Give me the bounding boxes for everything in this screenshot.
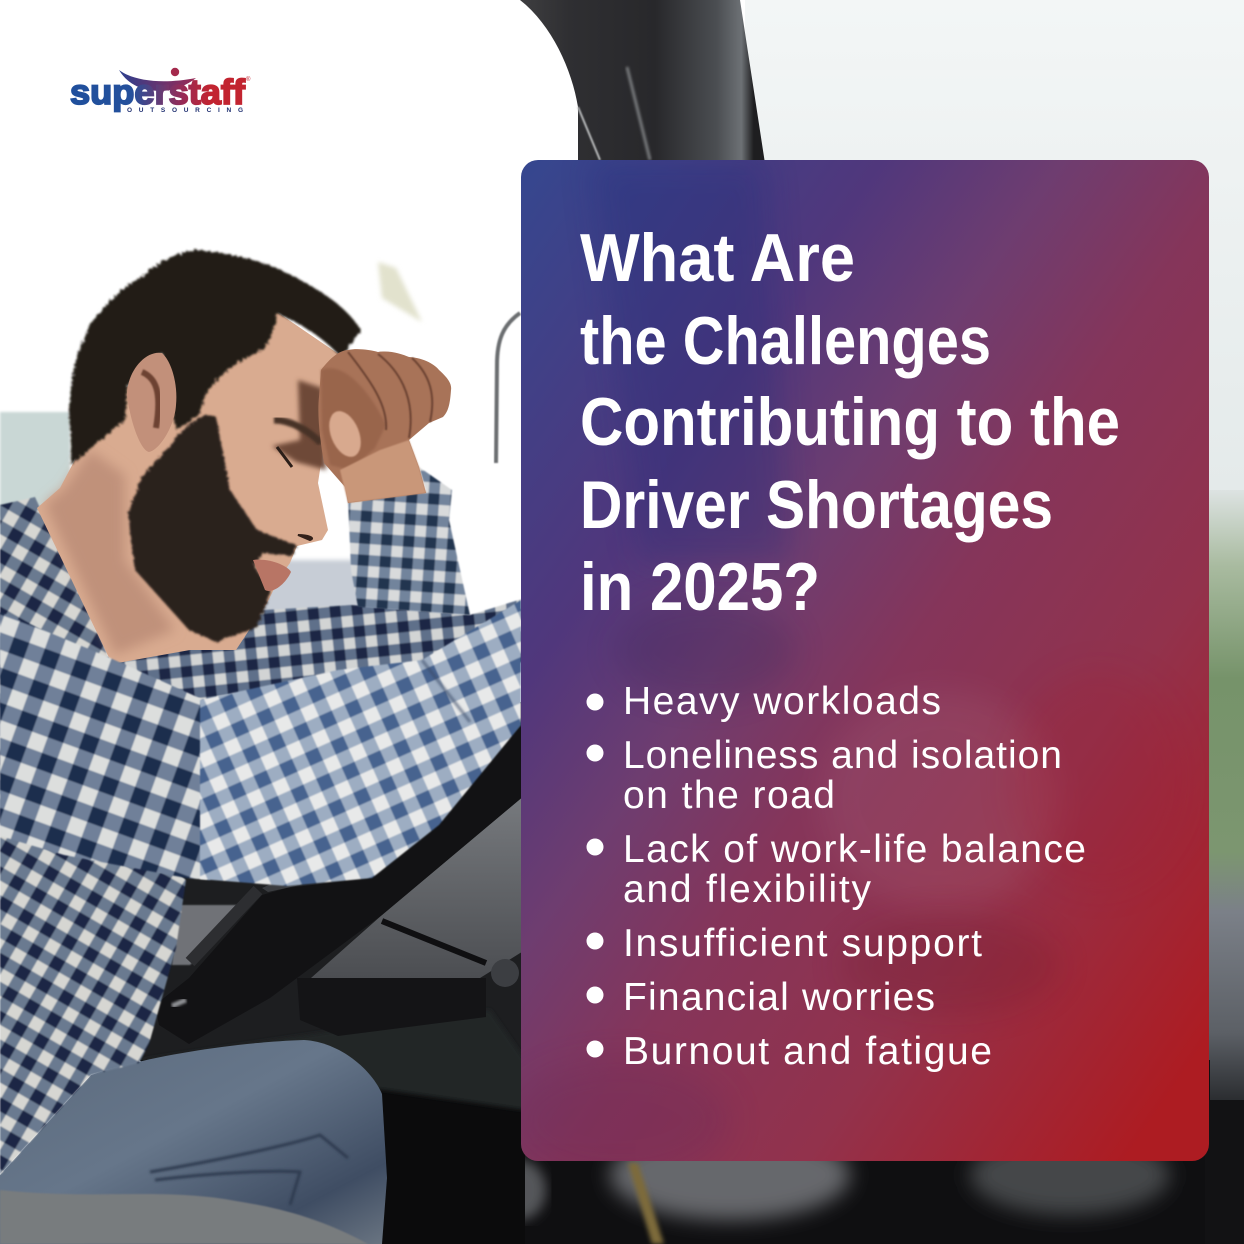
bullet list: Heavy workloads (623, 680, 941, 723)
bullet list: and flexibility (623, 868, 872, 911)
logo: SuperStaff Outsourcing: ® (246, 76, 251, 83)
bullet markers (586, 694, 604, 1058)
heading: in 2025? (580, 549, 820, 625)
heading: What Are (580, 220, 855, 296)
lower footwell (139, 1060, 525, 1244)
closed eye and brow (274, 420, 321, 467)
beard (128, 415, 297, 642)
heading: Driver Shortages (580, 467, 1053, 543)
logo: SuperStaff Outsourcing: superstaff (70, 73, 245, 112)
seat / other thigh (0, 1190, 368, 1244)
sleeve crease (422, 660, 470, 722)
neck shade (45, 450, 175, 655)
jeans pocket seam (150, 1135, 348, 1205)
chest shirt between beard and arm (105, 598, 525, 780)
main sleeve, forearm (200, 600, 521, 886)
bullet list: Financial worries (623, 976, 935, 1019)
bullet list: Loneliness and isolation (623, 734, 1062, 777)
mouth (253, 560, 291, 591)
fist (318, 349, 451, 503)
heading: the Challenges (580, 303, 991, 379)
neck and face (37, 312, 340, 664)
logo: SuperStaff Outsourcing: OUTSOURCING (127, 107, 243, 114)
bullet list: Insufficient support (623, 922, 982, 965)
blurred cab details seen through the panel (510, 160, 1190, 1180)
nose shadow (298, 535, 312, 540)
bullet list: Burnout and fatigue (623, 1030, 992, 1073)
gauge area inside wheel (172, 905, 250, 965)
heading (580, 220, 1120, 625)
forehead shade (272, 380, 326, 470)
bullet list (586, 680, 1086, 1073)
jeans (0, 1040, 387, 1244)
panel: gradient text card (510, 160, 1209, 1180)
bullet list: Lack of work-life balance (623, 828, 1086, 871)
main sleeve, upper arm (0, 612, 250, 880)
raised sleeve (348, 467, 470, 615)
window pillar (520, 0, 766, 170)
heading: Contributing to the (580, 384, 1120, 460)
steering wheel (155, 722, 525, 1044)
bullet list: on the road (623, 774, 835, 817)
dashboard panel (311, 795, 525, 978)
ear (127, 353, 176, 452)
driver in plaid shirt leaning on the steering wheel (0, 250, 525, 1244)
shirt body (0, 497, 186, 1175)
dark cab behind the wheel (135, 700, 525, 1244)
hair (69, 250, 361, 465)
